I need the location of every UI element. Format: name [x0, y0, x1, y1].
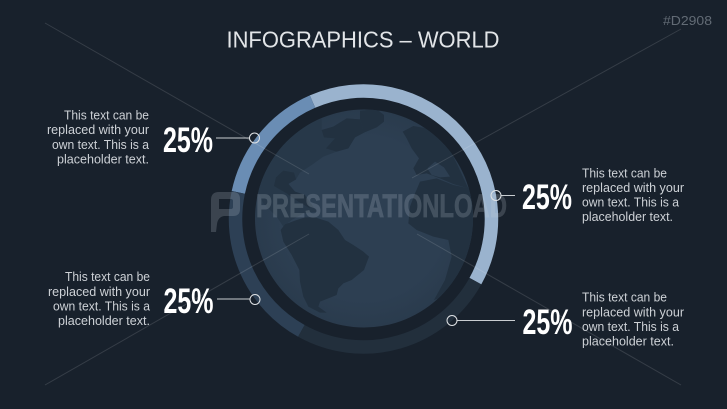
callout: bottom right: own text. This is a: [582, 320, 679, 334]
continent: North America: [278, 138, 336, 226]
callout: top left: This text can be: [64, 108, 149, 122]
watermark: [211, 188, 507, 232]
continent: Greenland: [360, 109, 384, 133]
globe: [253, 109, 483, 328]
ring segment: dark slate: [301, 281, 475, 347]
callout: bottom left: own text. This is a: [53, 300, 150, 314]
callout: top left: placeholder text.: [57, 152, 149, 166]
callout: right upper: placeholder text.: [582, 210, 673, 224]
callout: bottom right: 25%: [522, 303, 572, 342]
callout: top left: 25%: [163, 121, 213, 160]
title: INFOGRAPHICS – WORLD: [226, 26, 500, 52]
callout: bottom left: [48, 270, 260, 328]
callout: bottom right: [447, 291, 684, 349]
continent: Africa: [408, 178, 473, 300]
callout: bottom left: replaced with your: [48, 285, 150, 299]
ocean detail: Black Sea: [427, 162, 450, 177]
continent: Canadian Arctic: [322, 118, 364, 152]
continent: Mexico: [274, 171, 310, 208]
document code: #D2908: [663, 13, 712, 28]
continent: Europe: [403, 126, 468, 188]
callout: bottom left: This text can be: [65, 270, 150, 284]
callout: bottom left: placeholder text.: [58, 314, 150, 328]
callout: top left: [47, 108, 260, 166]
callout: right upper: replaced with your: [582, 181, 684, 195]
callout: bottom right: placeholder text.: [582, 335, 674, 349]
callout: bottom right: This text can be: [582, 291, 667, 305]
watermark: PRESENTATIONLOAD: [256, 188, 507, 224]
ring segment: mid blue: [238, 102, 312, 192]
callout: right upper: This text can be: [582, 166, 667, 180]
callout: right upper: own text. This is a: [582, 196, 679, 210]
ring segment: light blue: [312, 91, 491, 281]
callout: top left: replaced with your: [47, 123, 149, 137]
callout: bottom right: replaced with your: [582, 305, 684, 319]
callout: right upper: [491, 166, 684, 224]
callout: right upper: 25%: [522, 178, 572, 217]
ring segment: slate: [236, 192, 301, 331]
callout: top left: own text. This is a: [52, 138, 149, 152]
continent: South America: [281, 217, 369, 313]
callout: bottom left: 25%: [164, 282, 214, 321]
